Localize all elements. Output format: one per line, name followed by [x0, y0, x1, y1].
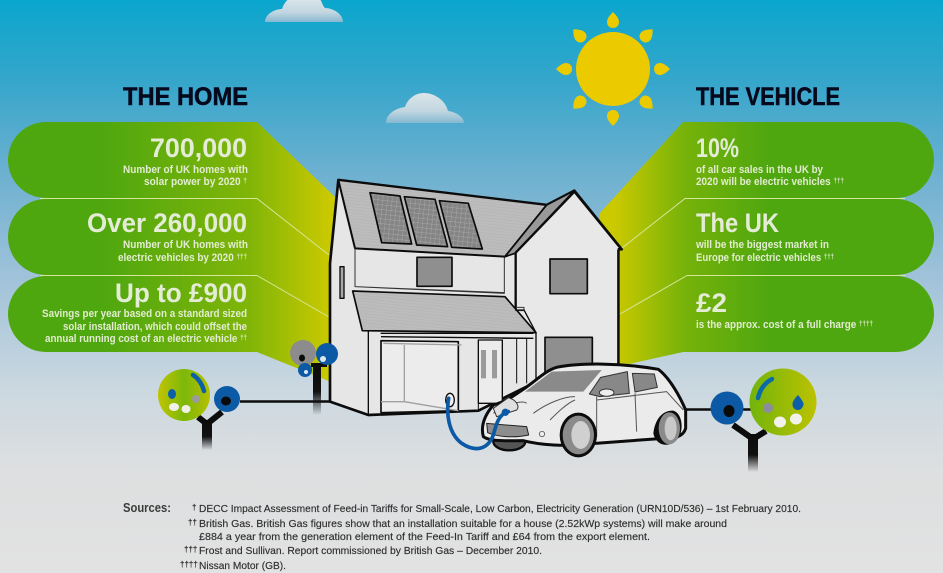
stat: 700,000: 700,000 [150, 133, 247, 163]
porch roof [353, 291, 536, 333]
car [482, 364, 686, 457]
charging cable [448, 398, 508, 449]
right upper window [550, 259, 587, 294]
car body [482, 364, 686, 445]
stat: up to 900 pounds: Savings per year based on a standard sized [42, 308, 247, 320]
house body [330, 180, 622, 415]
light beam left [46, 122, 336, 384]
stat: over 260,000: ††† [236, 254, 247, 261]
side window [340, 267, 344, 298]
icon: small network tree [290, 340, 338, 415]
stat: the uk: The UK [696, 208, 779, 238]
stat: 2 pounds: †††† [859, 321, 873, 328]
front side window [589, 372, 629, 397]
upper window [417, 257, 452, 286]
source three: Frost and Sullivan. Report commissioned by British Gas – December 2010. [199, 545, 542, 557]
main roof [338, 180, 547, 257]
heading: the home: THE HOME [123, 83, 248, 111]
rear wheel [653, 411, 682, 445]
heading: the vehicle: THE VEHICLE [696, 83, 840, 111]
solar panels [370, 193, 482, 249]
stat: over 260,000: electric vehicles by 2020 [118, 252, 246, 264]
stat: the uk [695, 208, 834, 264]
front door [478, 340, 502, 403]
source two: £884 a year from the generation element of the Feed-In Tariff and £64 from the export element. [199, 531, 650, 543]
lower window [545, 337, 592, 374]
charge socket [446, 393, 454, 407]
source two: †† [188, 518, 197, 527]
front wheel [560, 413, 597, 457]
stat: 10 percent: of all car sales in the UK by [696, 164, 824, 176]
icon: cloud top [265, 0, 343, 22]
ground lines [240, 402, 752, 410]
source one: † [192, 503, 196, 512]
panel: the home stats [8, 122, 336, 384]
stat: up to 900 pounds: solar installation, which could offset the [63, 321, 247, 333]
gable roof edge [505, 191, 574, 257]
house [330, 180, 622, 415]
gable front wall [516, 193, 618, 377]
stat: over 260,000: Number of UK homes with [123, 239, 248, 251]
garage door [381, 341, 462, 413]
car plug [502, 409, 509, 416]
stat: 2 pounds: is the approx. cost of a full charge [696, 319, 874, 331]
stat: the uk: will be the biggest market in [695, 239, 829, 251]
stat: the uk: ††† [824, 254, 834, 261]
stat: up to 900 pounds: annual running cost of an electric vehicle [45, 333, 261, 345]
source four: Nissan Motor (GB). [199, 560, 286, 572]
sources [123, 500, 801, 572]
icon: sun [556, 12, 670, 126]
stat: over 260,000: Over 260,000 [87, 208, 247, 238]
stat: 10 percent: 2020 will be electric vehicles [696, 176, 845, 188]
light beam right [600, 122, 890, 366]
far front wheel [493, 433, 525, 450]
illustration: house and car [330, 180, 686, 457]
stat: 2 pounds: £2 [696, 288, 727, 318]
stat: 10 percent: 10% [696, 133, 739, 163]
stat: 10 percent [696, 133, 844, 188]
source three: ††† [184, 545, 197, 554]
windshield [525, 370, 602, 392]
stat: 10 percent: ††† [833, 178, 844, 185]
pill one [734, 122, 934, 198]
grille [487, 423, 529, 437]
stat: over 260,000 [87, 208, 248, 264]
sources: Sources: [123, 500, 171, 515]
source four: †††† [180, 560, 198, 569]
stat: up to 900 pounds: Up to £900 [115, 278, 247, 308]
stat: 700,000: † [243, 178, 247, 185]
rear side window [632, 373, 657, 392]
stat: 700,000: solar power by 2020 [144, 176, 249, 188]
source two [188, 518, 727, 543]
source two: British Gas. British Gas figures show that an installation suitable for a house (2.52kWp systems) will make around [199, 518, 727, 530]
icon: cloud middle [386, 93, 464, 123]
stat: 2 pounds [696, 288, 873, 331]
pill three [734, 276, 934, 352]
icon: left network tree [158, 369, 240, 450]
stat: up to 900 pounds [42, 278, 247, 345]
pill three [8, 276, 208, 352]
panel: the vehicle stats [600, 122, 934, 366]
stat: the uk: Europe for electric vehicles [696, 252, 840, 264]
stat: 700,000 [123, 133, 248, 188]
headlight [493, 398, 518, 417]
pill two [734, 199, 934, 275]
stat: up to 900 pounds: †† [240, 335, 247, 342]
source one: DECC Impact Assessment of Feed-in Tariffs for Small-Scale, Low Carbon, Electricity Generation (URN10D/536) – 1st February 2010. [199, 503, 801, 515]
pill two [8, 199, 208, 275]
pill one [8, 122, 208, 198]
stat: 700,000: Number of UK homes with [123, 164, 248, 176]
icon: right network tree [710, 368, 816, 472]
